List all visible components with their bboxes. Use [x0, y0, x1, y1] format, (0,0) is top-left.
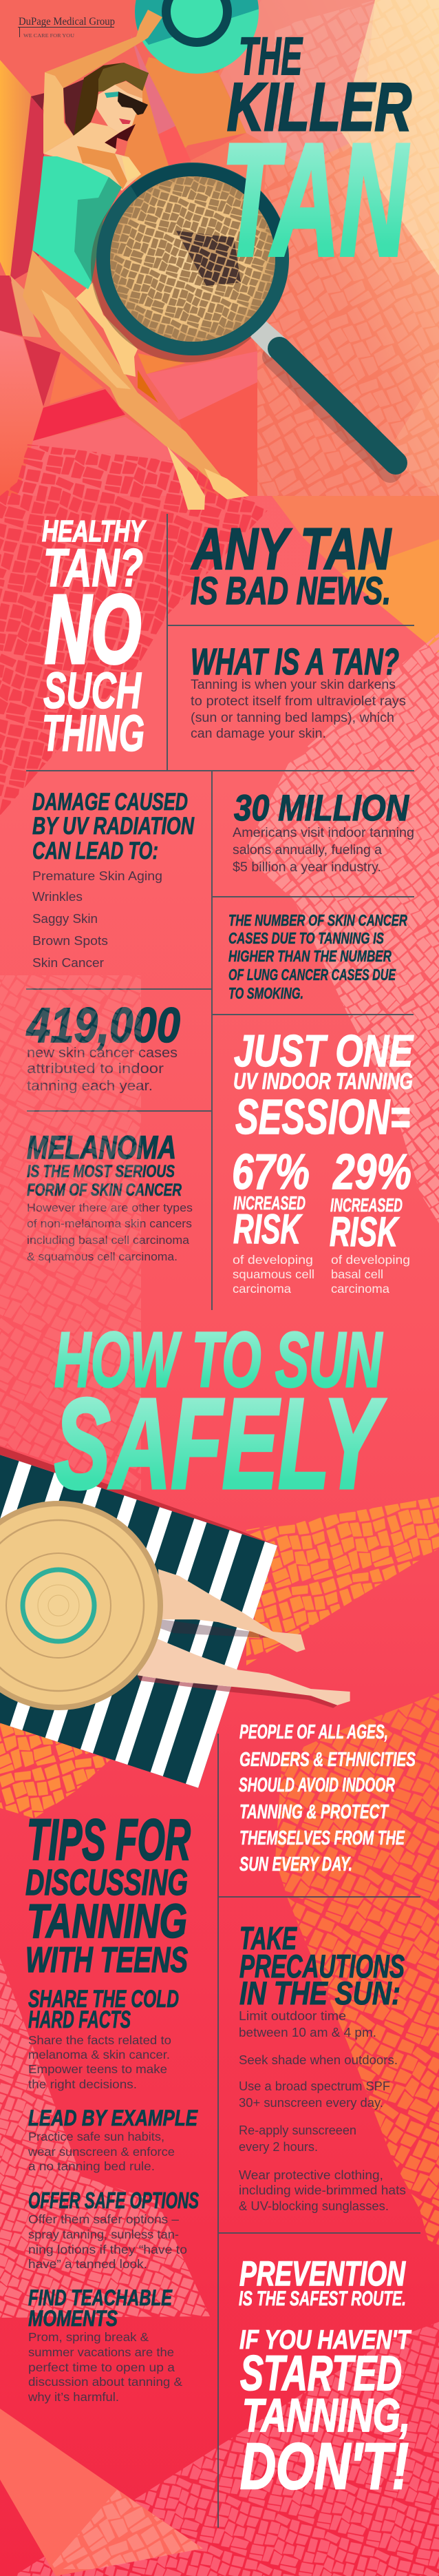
lower textures: [0, 1497, 439, 2576]
panel: tips for discussing tanning with teens: TANNING: [27, 1894, 187, 1948]
panel: any tan is bad news: [191, 517, 392, 613]
panel: any tan is bad news: ANY TAN: [191, 517, 392, 581]
panel: take precautions in the sun: Use a broad spectrum SPF: [239, 2079, 390, 2093]
panel: take precautions in the sun: Limit outdoor time: [239, 2009, 346, 2023]
hero background shapes: [0, 0, 439, 496]
panel: tips for discussing tanning with teens: SHARE THE COLD: [28, 1986, 179, 2013]
panel: damage caused by UV radiation: Premature Skin Aging: [32, 869, 162, 883]
panel: take precautions in the sun: Wear protective clothing,: [239, 2168, 383, 2182]
panel: healthy tan no such thing: SUCH: [43, 662, 142, 719]
panel: tips for discussing tanning with teens: FIND TEACHABLE: [28, 2285, 173, 2310]
panel: melanoma: IS THE MOST SERIOUS: [27, 1162, 175, 1181]
panel: tips for discussing tanning with teens: Share the facts related to: [28, 2033, 171, 2047]
panel: take precautions in the sun: Re-apply sunscreeen: [239, 2123, 356, 2137]
title: The Killer Tan: THE: [239, 27, 303, 86]
illustration: sunbathing woman: [23, 10, 249, 510]
divider lines: upper grid: [26, 514, 414, 1310]
panel: tips for discussing tanning with teens: why it’s harmful.: [28, 2390, 119, 2404]
panel: tips for discussing tanning with teens: the right decisions.: [28, 2077, 137, 2091]
panel: healthy tan no such thing: TAN?: [43, 537, 143, 598]
panel: what is a tan: Tanning is when your skin darkens: [191, 678, 396, 692]
panel: take precautions in the sun: [239, 1920, 406, 2213]
panel: people of all ages: [239, 1721, 416, 1876]
panel: damage caused by UV radiation: Skin Cancer: [32, 956, 104, 970]
panel: tips for discussing tanning with teens: discussion about tanning &: [28, 2375, 182, 2389]
panel: 419,000 new cases: [25, 999, 180, 1094]
panel: healthy tan no such thing: HEALTHY: [42, 515, 147, 548]
panel: just one UV session statistics: [232, 1026, 414, 1296]
panel: damage caused by UV radiation: Saggy Skin: [32, 912, 98, 926]
panel: tips for discussing tanning with teens: spray tanning, sunless tan-: [28, 2227, 179, 2241]
panel: tips for discussing tanning with teens: MOMENTS: [28, 2306, 118, 2331]
panel: damage caused by UV radiation: [32, 789, 195, 970]
panel: just one UV session statistics: of developing: [233, 1253, 313, 1267]
panel: tips for discussing tanning with teens: Offer them safer options –: [28, 2212, 179, 2226]
panel: just one UV session statistics: basal cell: [331, 1267, 383, 1281]
illustration: striped beach towel: [0, 1439, 277, 1788]
panel: prevention closing message: [239, 2254, 412, 2503]
panel: take precautions in the sun: between 10 am & 4 pm.: [239, 2026, 376, 2039]
panel: tips for discussing tanning with teens: LEAD BY EXAMPLE: [28, 2106, 198, 2130]
panel: just one UV session statistics: carcinoma: [233, 1282, 291, 1296]
panel: tips for discussing tanning with teens: wear sunscreen & enforce: [28, 2145, 175, 2159]
panel: skin cancer vs lung cancer: [228, 911, 407, 1002]
panel: tips for discussing tanning with teens: [25, 1807, 199, 2404]
panel: 419,000 new cases: attributed to indoor: [27, 1061, 164, 1077]
panel: melanoma: MELANOMA: [27, 1129, 176, 1165]
panel: just one UV session statistics: carcinoma: [331, 1282, 389, 1296]
panel: tips for discussing tanning with teens: HARD FACTS: [28, 2006, 131, 2033]
panel: tips for discussing tanning with teens: melanoma & skin cancer.: [28, 2048, 170, 2061]
panel: what is a tan: [191, 641, 406, 741]
panel: tips for discussing tanning with teens: TIPS FOR: [27, 1807, 191, 1872]
panel: tips for discussing tanning with teens: perfect time to open up a: [28, 2360, 175, 2374]
panel: 30 million: $5 billion a year industry.: [233, 860, 381, 875]
panel: melanoma: of non-melanoma skin cancers: [27, 1217, 192, 1230]
panel: healthy tan no such thing: THING: [42, 705, 144, 762]
panel: just one UV session statistics: RISK: [233, 1206, 303, 1252]
panel: skin cancer vs lung cancer: TO SMOKING.: [228, 984, 303, 1002]
panel: tips for discussing tanning with teens: WITH TEENS: [25, 1940, 188, 1980]
panel: take precautions in the sun: Seek shade when outdoors.: [239, 2053, 398, 2067]
panel: damage caused by UV radiation: Brown Spots: [32, 934, 108, 948]
hero skin textures: [0, 0, 439, 816]
illustration: legs on towel: [137, 1569, 350, 1708]
panel: just one UV session statistics: INCREASED: [233, 1192, 306, 1214]
icon: sun hat top view: [131, 0, 261, 74]
panel: just one UV session statistics: squamous cell: [233, 1267, 314, 1281]
panel: tips for discussing tanning with teens: OFFER SAFE OPTIONS: [28, 2188, 199, 2213]
panel: take precautions in the sun: 30+ sunscreen every day.: [239, 2096, 383, 2110]
panel: tips for discussing tanning with teens: have” a tanned look.: [28, 2257, 147, 2271]
panel: melanoma: including basal cell carcinoma: [27, 1234, 190, 1247]
panel: damage caused by UV radiation: BY UV RADIATION: [32, 813, 195, 840]
texture overlay across left column: [0, 975, 141, 1491]
logo: WE CARE FOR YOU: [23, 33, 74, 39]
panel: take precautions in the sun: every 2 hours.: [239, 2140, 318, 2154]
logo: DuPage Medical Group: [19, 16, 115, 28]
panel: tips for discussing tanning with teens: a no tanning bed rule.: [28, 2159, 155, 2173]
panel: melanoma: & squamous cell carcinoma.: [27, 1250, 178, 1263]
panel: tips for discussing tanning with teens: summer vacations are the: [28, 2345, 174, 2359]
logo: [18, 16, 115, 39]
panel: 419,000 new cases: new skin cancer cases: [27, 1046, 178, 1061]
panel: tips for discussing tanning with teens: DISCUSSING: [25, 1862, 188, 1903]
panel: just one UV session statistics: 67%: [232, 1145, 310, 1200]
panel: damage caused by UV radiation: CAN LEAD TO:: [32, 838, 158, 864]
panel: tips for discussing tanning with teens: Prom, spring break &: [28, 2330, 149, 2344]
panel: just one UV session statistics: 29%: [332, 1145, 411, 1200]
panel: melanoma: However there are other types: [27, 1201, 193, 1214]
panel: just one UV session statistics: of developing: [331, 1253, 410, 1267]
panel: healthy tan no such thing: NO: [45, 574, 141, 683]
heading: how to sun safely: [54, 1316, 386, 1515]
icon: magnifying glass over skin: [91, 163, 396, 471]
panel: people of all ages: SUN EVERY DAY.: [239, 1853, 352, 1876]
panel: damage caused by UV radiation: Wrinkles: [32, 890, 83, 904]
panel: 419,000 new cases: 419,000: [25, 999, 180, 1053]
panel: 419,000 new cases: tanning each year.: [27, 1079, 153, 1094]
panel: tips for discussing tanning with teens: Practice safe sun habits,: [28, 2130, 164, 2143]
panel: what is a tan: to protect itself from ultraviolet rays: [191, 694, 406, 709]
panel: 30 million: salons annually, fueling a: [233, 843, 382, 858]
panel: melanoma: [27, 1129, 193, 1263]
panel: 30 million: 30 MILLION: [234, 788, 409, 829]
panel: what is a tan: (sun or tanning bed lamps), which: [191, 711, 394, 725]
panel: what is a tan: can damage your skin.: [191, 727, 326, 741]
panel: take precautions in the sun: including wide-brimmed hats: [239, 2183, 406, 2197]
panel: take precautions in the sun: TAKE: [239, 1920, 297, 1956]
panel: tips for discussing tanning with teens: ning lotions if they “have to: [28, 2243, 187, 2256]
mid textures: [244, 633, 439, 1223]
panel: just one UV session statistics: RISK: [330, 1209, 400, 1255]
panel: healthy tan no such thing: [42, 515, 147, 762]
icon: straw hat: [0, 1501, 163, 1710]
panel: melanoma: FORM OF SKIN CANCER: [27, 1181, 182, 1200]
title: The Killer Tan: [222, 27, 411, 289]
divider lines: lower grid: [218, 1734, 420, 2528]
panel: take precautions in the sun: IN THE SUN:: [239, 1975, 400, 2011]
panel: tips for discussing tanning with teens: Empower teens to make: [28, 2062, 167, 2076]
panel: damage caused by UV radiation: DAMAGE CAUSED: [32, 789, 188, 816]
panel: 30 million: [233, 788, 414, 875]
panel: take precautions in the sun: & UV-blocking sunglasses.: [239, 2199, 389, 2213]
panel: 30 million: Americans visit indoor tanning: [233, 826, 414, 840]
